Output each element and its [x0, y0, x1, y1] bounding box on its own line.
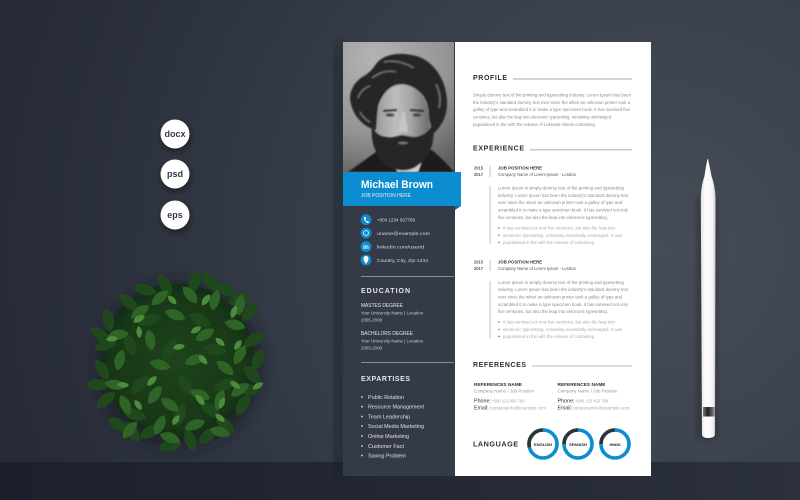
- job entry 1: industry. Lorem Ipsum has been the industry's standard dummy text: [498, 193, 629, 198]
- job entry 1: ever since the when an unknown printer took a galley of type and: [498, 200, 623, 205]
- profile text: [473, 92, 632, 127]
- education section: Your University Name | Location: [361, 338, 424, 344]
- reference 2: Company Name / Job Position: [558, 388, 618, 394]
- name banner: [343, 172, 461, 210]
- heading: language: LANGUAGE: [473, 440, 518, 448]
- expertises section: Online Marketing: [368, 434, 409, 440]
- name banner: Michael Brown: [361, 179, 433, 191]
- job entry 1: five centuries, but also the leap into electronic typesetting.: [498, 215, 608, 220]
- job entry 1: [474, 166, 629, 245]
- education section: [361, 288, 424, 350]
- job entry 1: It has survived not only five centuries, but also the leap into: [503, 226, 616, 230]
- format badges: [160, 120, 191, 233]
- reference 2: companyinfo@example.com: [572, 406, 630, 410]
- profile text: galley of type and scrambled it to make a type specimen book. It has survived five: [473, 107, 631, 112]
- job entry 1: popularised in the with the release of containing: [503, 240, 595, 245]
- language ring: Spanish: [564, 430, 592, 458]
- reference 1: companyinfo@example.com: [489, 406, 546, 410]
- contact: phone: +000 1234 567789: [377, 218, 415, 224]
- reference 1: REFERENCES NAME: [474, 382, 523, 388]
- expertises section: Social Media Marketing: [368, 424, 424, 430]
- name banner: JOB POSITION HERE: [361, 193, 412, 199]
- language ring: Spanish: SPANISH: [569, 443, 587, 447]
- job entry 2: [474, 260, 629, 339]
- badge: eps: eps: [167, 210, 183, 220]
- panel: dark sidebar: [343, 42, 455, 476]
- job entry 2: JOB POSITION HERE: [498, 260, 542, 264]
- job entry 2: 2015: [474, 260, 484, 264]
- job entry 2: five centuries, but also the leap into electronic typesetting.: [498, 309, 608, 314]
- badge: psd: psd: [167, 169, 183, 179]
- job entry 2: Lorem Ipsum is simply dummy text of the printing and typesetting: [498, 280, 625, 285]
- portrait photo: [343, 42, 454, 172]
- job entry 1: electronic typesetting, remaining essentially unchanged. It was: [503, 233, 623, 238]
- icon: plant: [86, 269, 267, 453]
- resume sheet: [343, 42, 651, 476]
- job entry 1: JOB POSITION HERE: [498, 166, 542, 170]
- reference 2: Email:: [558, 406, 572, 412]
- reference 2: +000 123 456 789: [575, 398, 609, 404]
- expertises section: [361, 376, 425, 460]
- job entry 1: scrambled it to make a type specimen book. It has survived not only: [498, 208, 629, 212]
- expertises section: EXPARTISES: [361, 376, 410, 383]
- language ring: English: [529, 430, 557, 458]
- heading: experience: EXPERIENCE: [473, 146, 524, 152]
- language ring: Hindi: HINDI: [610, 443, 620, 447]
- expertises section: Team Leadership: [368, 414, 410, 420]
- expertises section: Customer Fact: [368, 444, 405, 450]
- resume sheet shadow: [334, 46, 346, 474]
- icon: stylus pencil: [696, 159, 718, 440]
- job entry 2: scrambled it to make a type specimen book. It has survived not only: [498, 302, 629, 307]
- heading: references: REFERENCES: [473, 362, 526, 369]
- heading: profile: PROFILE: [473, 75, 507, 82]
- job entry 2: ever since the when an unknown printer took a galley of type and: [498, 294, 623, 300]
- job entry 2: industry. Lorem Ipsum has been the industry's standard dummy text: [498, 287, 629, 292]
- profile text: centuries, but also the leap into electronic typesetting, remaining unchanged: [473, 114, 612, 120]
- badge: docx: docx: [164, 129, 186, 139]
- reference 1: [474, 382, 546, 412]
- education section: Your University Name | Location: [361, 310, 424, 316]
- reference 1: Phone:: [474, 398, 491, 404]
- job entry 1: Lorem Ipsum is simply dummy text of the printing and typesetting: [498, 186, 625, 190]
- expertises section: Saving Problem: [368, 454, 406, 460]
- profile text: the industry's standard dummy text ever since the when an unknown printer took a: [473, 100, 631, 105]
- contact: email: uname@example.com: [377, 231, 430, 237]
- expertises section: Resource Management: [368, 405, 425, 411]
- reference 2: [558, 382, 630, 412]
- contact: linkedin: in: [363, 244, 369, 251]
- contact: linkedin: [361, 241, 424, 252]
- reference 1: Company Name / Job Position: [474, 388, 535, 394]
- language ring: Hindi: [601, 430, 629, 458]
- language ring: English: ENGLISH: [534, 443, 552, 447]
- contact: linkedin: linkedin.com/userid: [377, 244, 424, 250]
- reference 2: REFERENCES NAME: [558, 382, 606, 388]
- profile text: popularised in the with the release of Lokraset sheets containing.: [473, 122, 596, 127]
- reference 2: Phone:: [558, 398, 574, 404]
- job entry 1: 2017: [474, 172, 484, 177]
- education section: 2005-2008: [361, 318, 383, 322]
- education section: BACHELORS DEGREE: [361, 331, 414, 337]
- floor: [0, 462, 800, 500]
- job entry 2: It has survived not only five centuries, but also the leap into: [503, 320, 616, 324]
- education section: EDUCATION: [361, 288, 410, 295]
- profile text: Simply dummy text of the printing and typesetting industry. Lorem Ipsum has been: [473, 92, 632, 98]
- panel: main white page: [455, 42, 651, 476]
- job entry 2: Company Name of Lorem Ipsum - London: [498, 266, 577, 271]
- expertises section: Public Relation: [368, 395, 404, 401]
- reference 1: Email:: [474, 406, 488, 412]
- job entry 2: 2017: [474, 266, 484, 271]
- education section: MASTES DEGREE: [361, 303, 404, 309]
- job entry 1: Company Name of Lorem Ipsum - London: [498, 172, 577, 177]
- job entry 1: 2015: [474, 166, 484, 170]
- job entry 2: popularised in the with the release of containing: [503, 334, 595, 339]
- contact list: [361, 214, 430, 265]
- education section: 2005-2008: [361, 346, 383, 350]
- contact: location: Country, City, Zip-1234: [377, 258, 428, 264]
- job entry 2: electronic typesetting, remaining essentially unchanged. It was: [503, 327, 623, 332]
- reference 1: +000 123 456 789: [492, 398, 525, 404]
